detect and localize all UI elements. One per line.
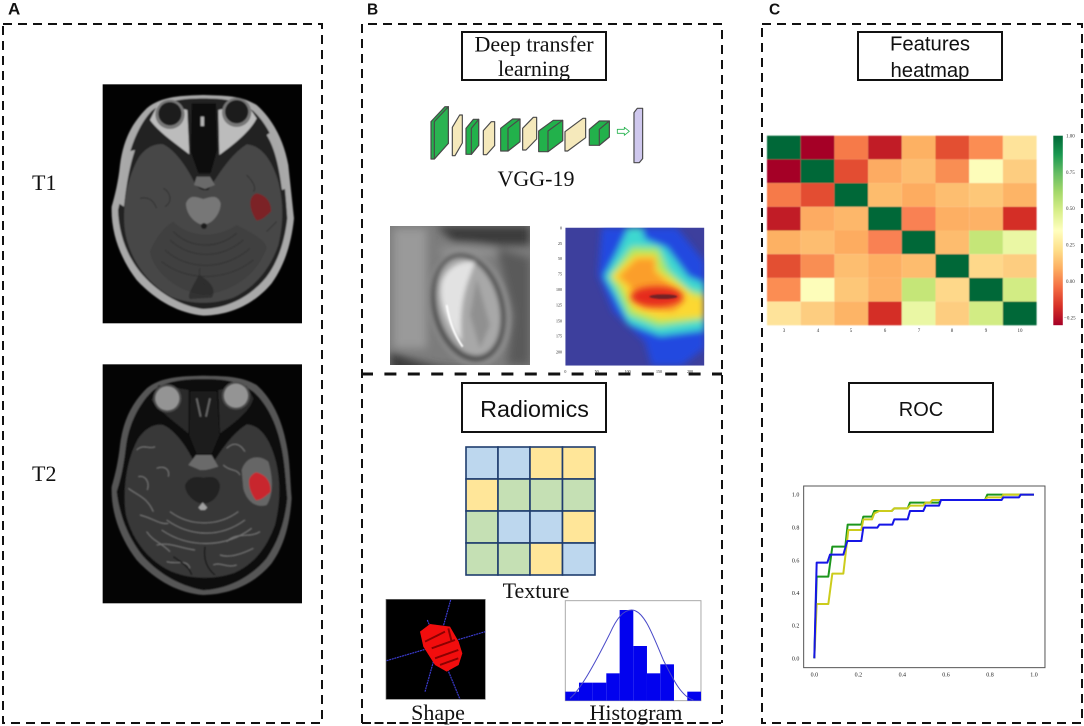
heatmap axis ticks: 175 [556,334,562,339]
T1 MRI scan [103,84,302,323]
panel label B: B [367,2,378,18]
tumor heatmap (Grad-CAM) [556,225,704,374]
heatmap column labels: 3 [783,329,786,334]
label VGG-19: VGG-19 [498,166,574,191]
heatmap axis ticks: 125 [556,303,562,308]
heading: Deep transfer learning: Deep transfer [474,32,594,56]
heading: Radiomics: Radiomics [480,396,589,422]
colorbar labels: 0.00 [1066,280,1075,285]
ROC y axis labels: 0.4 [792,591,799,597]
colorbar [1053,136,1063,325]
heatmap axis ticks: 50 [595,369,599,374]
row 8 [767,302,1037,325]
heatmap column labels: 4 [817,329,820,334]
ROC y axis labels: 0.8 [792,526,799,532]
colorbar labels: 0.25 [1066,244,1075,248]
ROC x axis labels: 0.0 [811,673,818,679]
ROC y axis labels: 0.0 [792,656,799,662]
heatmap axis ticks: 0 [564,369,566,374]
colorbar labels: 0.75 [1066,171,1075,176]
row 4 [767,207,1037,230]
ROC y axis labels [792,493,799,662]
heatmap axis ticks: 25 [558,241,562,246]
label Shape: Shape [411,700,465,725]
label Texture: Texture [503,578,569,603]
histogram [565,601,701,701]
heatmap axis ticks: 75 [558,272,562,277]
heatmap axis ticks: 100 [625,369,631,374]
grayscale tumor crop [390,226,530,376]
colorbar labels [1064,134,1076,322]
yellow curve [814,495,1034,658]
heatmap axis ticks: 200 [556,349,562,354]
panel label A: A [8,0,20,18]
row 3 [767,183,1037,207]
ROC x axis labels: 1.0 [1030,673,1038,679]
3D shape image [386,599,485,699]
heading: Radiomics [462,383,606,432]
green curve [814,495,1034,658]
panel A: MRI sequences [3,0,322,723]
heatmap column labels: 10 [1018,329,1023,334]
heading: Deep transfer learning [462,32,606,81]
heatmap axis ticks: 200 [687,369,693,374]
ROC chart [792,486,1045,679]
ROC x axis labels: 0.2 [855,673,862,679]
heatmap axis ticks [556,225,693,374]
heatmap axis ticks: 100 [556,287,562,292]
label T1: T1 [32,170,56,195]
VGG-19 network diagram [431,107,643,163]
heading: Features heatmap: Features [890,34,970,56]
divider between B sections [361,372,722,376]
heatmap column labels: 9 [985,329,988,334]
ROC x axis labels: 0.6 [942,673,950,679]
heading: Features heatmap: heatmap [891,60,969,82]
heatmap axis ticks: 150 [656,369,662,374]
heatmap axis ticks: 150 [556,318,562,323]
correlation heatmap [767,134,1076,334]
heading: Features heatmap [858,32,1002,82]
panel label C: C [769,2,780,18]
heatmap column labels: 7 [918,329,921,334]
heatmap axis ticks: 0 [560,225,562,230]
heading: Deep transfer learning: learning [498,56,570,81]
colorbar labels: 1.00 [1066,134,1075,140]
ROC y axis labels: 0.2 [792,624,799,630]
row 7 [767,278,1037,302]
row 6 [767,254,1037,278]
ROC y axis labels: 1.0 [792,493,799,499]
panel B: radiomics [362,383,722,725]
blue curve [814,495,1034,658]
ROC x axis labels: 0.8 [986,673,994,679]
heading: ROC: ROC [899,399,943,421]
ROC x axis labels [811,673,1038,679]
panel C: features and ROC [762,2,1082,723]
heatmap axis ticks: 50 [558,256,562,261]
texture grid [466,447,595,575]
row 5 [767,230,1037,254]
label T2: T2 [32,461,56,486]
panel B: deep transfer learning [362,2,722,723]
colorbar labels: −0.25 [1064,316,1076,322]
ROC y axis labels: 0.6 [792,558,799,564]
T2 MRI scan [103,364,302,603]
heatmap column labels [783,329,1023,334]
heatmap column labels: 8 [951,329,954,334]
heatmap column labels: 5 [850,329,853,334]
colorbar labels: 0.50 [1066,207,1075,212]
heading: ROC [849,383,993,432]
heatmap column labels: 6 [884,329,887,334]
ROC x axis labels: 0.4 [899,673,906,679]
row 2 [767,159,1037,183]
row 1 [767,136,1037,159]
label Histogram: Histogram [590,700,682,725]
